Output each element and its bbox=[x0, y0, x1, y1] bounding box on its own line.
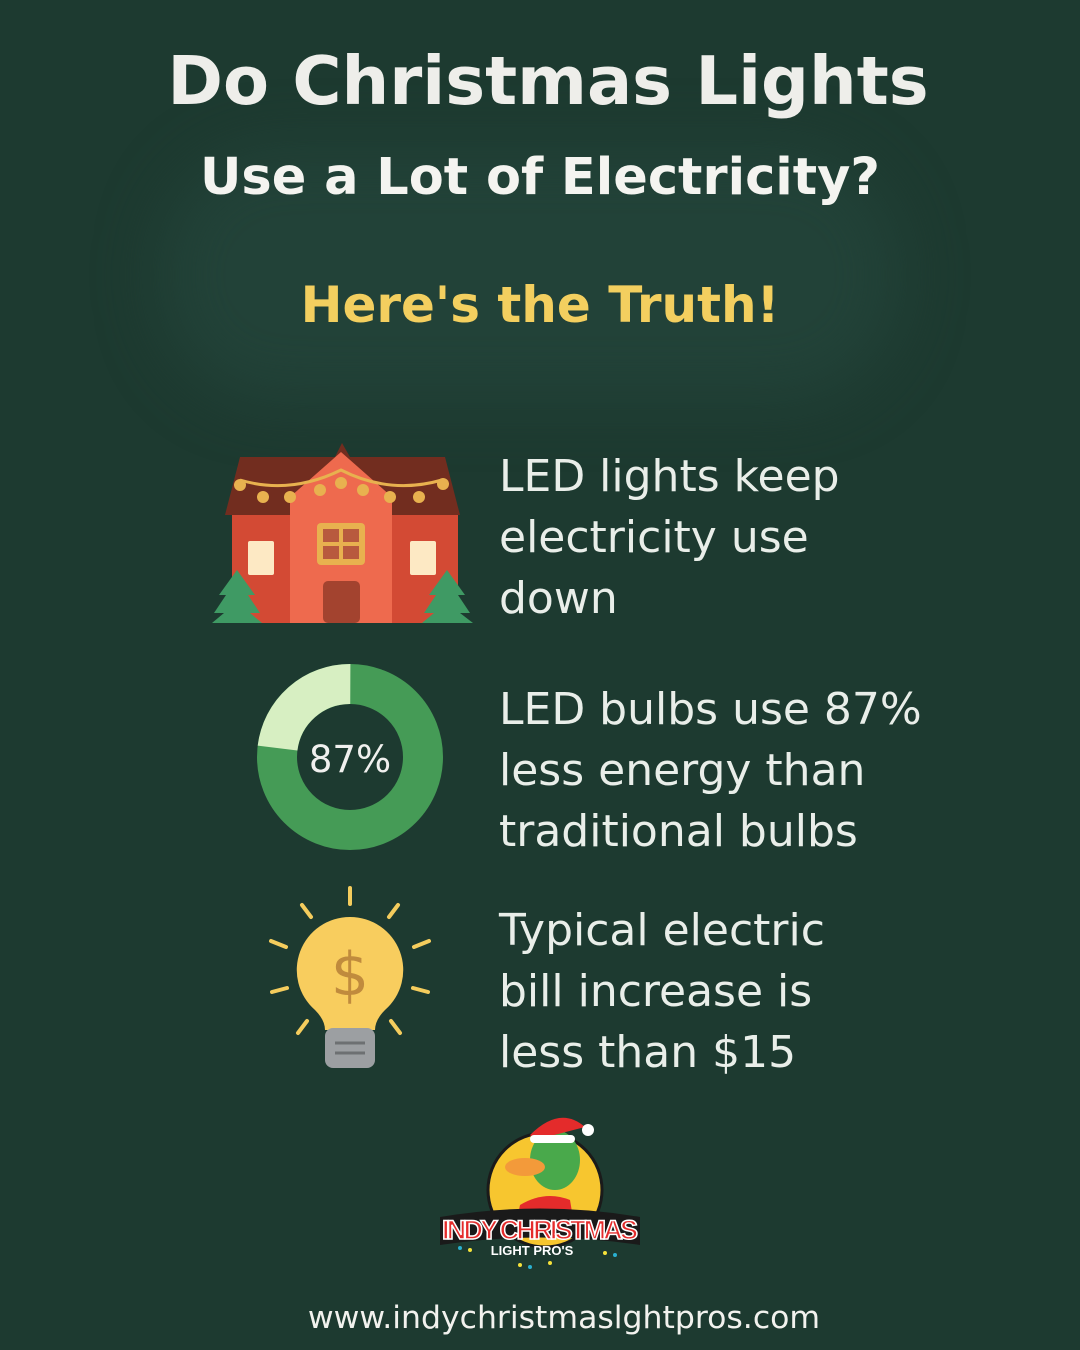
icon: house bbox=[212, 443, 473, 623]
title: Do Christmas Lights bbox=[167, 42, 929, 120]
text: bill increase: bill increase is bbox=[499, 966, 812, 1017]
background glow bbox=[160, 150, 900, 400]
text: bill increase bbox=[498, 905, 825, 1078]
text: bill increase: Typical electric bbox=[499, 905, 825, 956]
text: LED lights: electricity use bbox=[499, 512, 809, 563]
text: bill increase: less than $15 bbox=[499, 1027, 796, 1078]
text: LED lights bbox=[499, 451, 840, 624]
text: LED bulbs: LED bulbs use 87% bbox=[499, 684, 922, 735]
subtitle: Use a Lot of Electricity? bbox=[200, 148, 880, 207]
icon: lightbulb: $ bbox=[331, 940, 369, 1010]
text: LED lights: down bbox=[499, 573, 618, 624]
footer url: www.indychristmaslghtpros.com bbox=[308, 1300, 820, 1336]
text: LED lights: LED lights keep bbox=[499, 451, 840, 502]
icon: lightbulb bbox=[268, 886, 432, 1068]
logo: LIGHT PRO'S bbox=[491, 1243, 574, 1258]
logo bbox=[440, 1118, 640, 1269]
logo: INDY CHRISTMAS bbox=[442, 1215, 638, 1245]
text: LED bulbs: traditional bulbs bbox=[499, 806, 858, 857]
chart: donut 87% bbox=[257, 664, 443, 850]
text: LED bulbs bbox=[499, 684, 922, 857]
text: LED bulbs: less energy than bbox=[499, 745, 865, 796]
chart: donut 87%: 87% bbox=[309, 738, 391, 781]
tagline: Here's the Truth! bbox=[301, 276, 779, 334]
